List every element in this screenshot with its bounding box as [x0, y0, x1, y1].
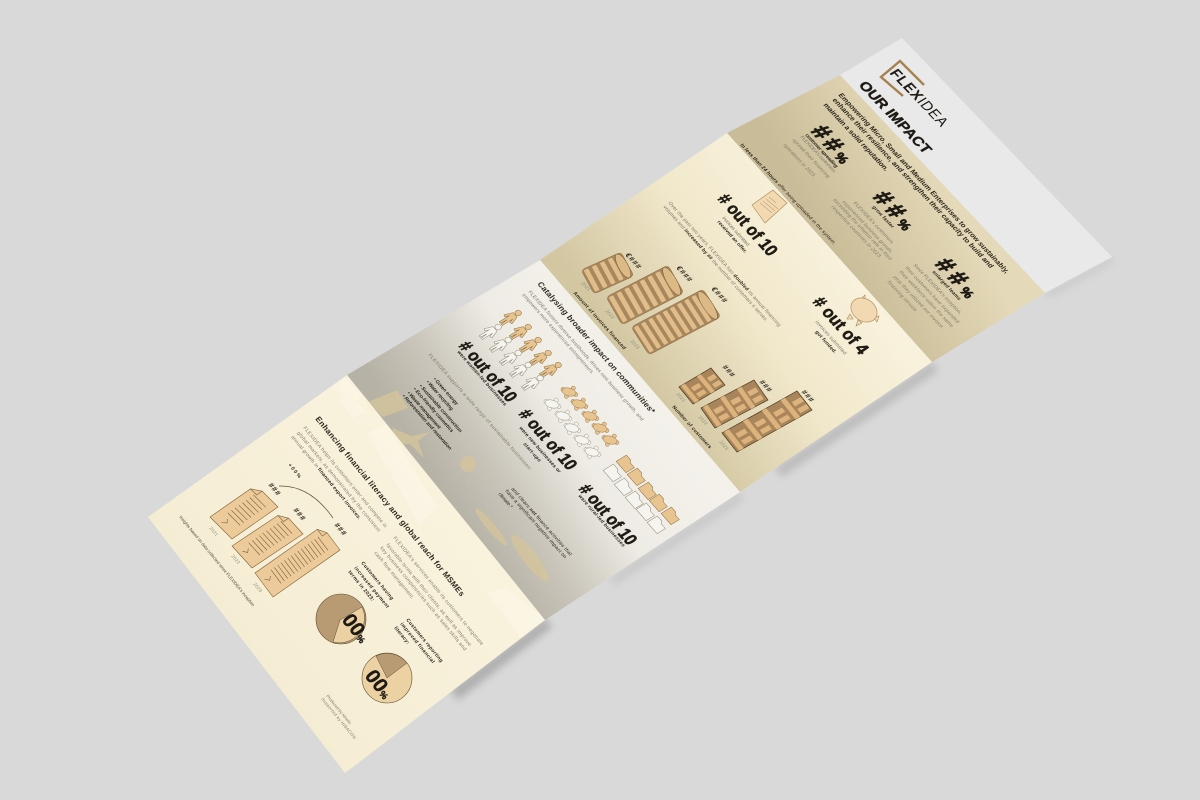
- values and years: [670, 363, 817, 451]
- heading: Enhancing financial literacy and global reach for MSMEs: [313, 415, 467, 598]
- values and years: 2023: [629, 339, 641, 350]
- stat: women-led: # out of 10: [455, 338, 522, 405]
- label: financial literacy: literacy:: [392, 626, 411, 646]
- text: exclusion note: and clears not finance activities that: [509, 487, 574, 557]
- label: payment terms: terms in 2023:: [346, 570, 376, 603]
- text: exclusion note: climate.*: [496, 492, 514, 509]
- text: export growth: global markets, as demonstrated by the consistent: [295, 431, 382, 534]
- values and years: [571, 251, 730, 351]
- text: services: cash flow management.: [372, 551, 415, 601]
- text: financing growth: Over the past two years, FLEXIDEA has doubled its annual financing: [666, 201, 782, 328]
- list: sustainable sectors: • Reforestation and restoration: [400, 394, 453, 451]
- values and years: 2022: [230, 554, 242, 565]
- stat: invoices funded: # out of 4: [809, 293, 873, 358]
- list: sustainable sectors: • Waste management: [405, 391, 442, 430]
- values and years: 2022: [604, 309, 616, 320]
- stat: customer spreading: [781, 121, 860, 179]
- icon: logo frame: [881, 61, 924, 96]
- decorative pale blocks: [333, 378, 545, 637]
- list: sustainable sectors: • Water recycling: [424, 380, 454, 412]
- stat: enlarged teams: [885, 254, 985, 329]
- credits: Produced by Kinetic: [325, 694, 353, 725]
- panel: white logo header: [840, 38, 1112, 293]
- label: payment terms: increased payment: [352, 566, 390, 610]
- arrow: growth arc: [279, 486, 333, 518]
- stat: customer spreading: ##%: [805, 121, 860, 168]
- text: export growth: annual growth in financed export invoices.: [289, 435, 362, 521]
- values and years: [208, 481, 349, 593]
- panel: financing growth: [540, 133, 932, 492]
- text: financing growth: volumes and increased by ## the number of customers it serves.: [661, 205, 769, 323]
- label: payment terms: [346, 561, 395, 610]
- values and years: 2023: [252, 582, 264, 593]
- list: sustainable sectors: [400, 377, 463, 451]
- stat: grow faster: exceeding the inflation rate in their: [831, 198, 894, 262]
- note: response time: In less than 24 hours offer being uploaded in the system.: [738, 143, 837, 246]
- growth label: +00%: [286, 463, 302, 480]
- icons: folders: [603, 455, 681, 534]
- panel: community impact: [347, 260, 740, 620]
- stat: customer spreading: customer spreading: [803, 133, 839, 169]
- stat: invoices with offer: received an offer.: [715, 220, 749, 255]
- text: services: key business competencies such as sales skills and: [378, 546, 468, 652]
- values and years: ###: [757, 378, 775, 394]
- store stack 2021: [679, 368, 725, 404]
- pie chart: financial literacy: 00%: [360, 666, 398, 703]
- intro text: enhance their resilience, and strengthen their capacity to build and: [830, 97, 995, 269]
- chart: number of customers: [670, 363, 817, 452]
- intro text: maintain a solid reputation.: [821, 102, 891, 172]
- values and years: €###: [623, 251, 644, 271]
- text: exclusion note: have a significant negative impact on: [503, 489, 568, 560]
- label: financial literacy: Customers reporting: [404, 618, 444, 664]
- stat: customer spreading: FLEXIDEA's customers: [798, 135, 837, 174]
- stat: enlarged teams: Since FLEXIDEA's inception,: [911, 263, 963, 316]
- stat: rural-led: were rural-led businesses: [576, 493, 626, 548]
- stat: new businesses: start-ups: [521, 442, 542, 463]
- intro text: FLEXIDEA fosters diverse livelihoods, drives new business growth, and: [526, 290, 645, 422]
- values and years: ###: [332, 521, 349, 538]
- stat: enlarged teams: financing service.: [885, 280, 919, 314]
- paper shadow: [450, 257, 1114, 700]
- document 2021: [210, 485, 278, 539]
- stat: enlarged teams: ##%: [929, 254, 985, 302]
- footnote: insights: Insights based on data collected since FLEXIDEA's inception: [178, 515, 256, 608]
- stat: invoices funded: invoices submitted: [813, 320, 848, 356]
- logo wordmark: FLEXIDEA: [886, 67, 951, 130]
- pie chart: payment terms: 00%: [337, 610, 375, 647]
- icons: women-led people: [477, 307, 565, 393]
- panel: financial literacy: [148, 375, 545, 773]
- heading: Catalysing broader impact on communities*: [535, 280, 658, 415]
- intro text: empowers more experienced entrepreneurs.: [520, 293, 595, 376]
- stat: new businesses: # out of 10: [515, 406, 582, 473]
- document 2023: [255, 526, 340, 597]
- icon: piggy bank: [846, 293, 882, 327]
- values and years: 2021: [580, 281, 592, 292]
- store stack 2023: [722, 391, 812, 452]
- text: sustainable range: FLEXIDEA supports a wide range of sustainable businesses:: [426, 353, 533, 472]
- label: payment terms: Customers having: [359, 561, 395, 601]
- pie chart: financial literacy: [360, 653, 412, 703]
- icons: new business: [544, 386, 619, 458]
- values and years: 2021: [208, 526, 220, 537]
- title: OUR IMPACT: [855, 78, 936, 156]
- list: sustainable sectors: • Eco-friendly cosmetics: [411, 387, 455, 434]
- coin stack 2023: [631, 289, 721, 355]
- credits: Supported by HIBACON: [320, 697, 357, 740]
- stat: invoices with offer: # out of 10: [714, 190, 782, 259]
- stat: grow faster: respective countries in 2023.: [829, 205, 883, 260]
- values and years: Amount of invoices financed: [571, 291, 627, 351]
- store stack 2022: [701, 380, 768, 428]
- text: services: FLEXIDEA's services enable its customers to negotiate: [391, 536, 485, 647]
- stat: enlarged teams: year they utilized our invoice: [891, 275, 945, 329]
- values and years: ###: [266, 481, 283, 498]
- stat: grow faster: ##%: [867, 187, 923, 235]
- stat: enlarged teams: their customers have expanded: [903, 266, 961, 325]
- stat: grow faster: [829, 187, 923, 262]
- stat: customer spreading: spread their financing: [790, 138, 831, 179]
- values and years: 2021: [675, 392, 687, 403]
- label: financial literacy: improved financial: [398, 622, 436, 665]
- values and years: 2022: [697, 415, 709, 426]
- stat: enlarged teams: enlarged teams: [930, 270, 962, 302]
- values and years: 2023: [718, 440, 730, 451]
- values and years: ###: [799, 388, 817, 404]
- list: sustainable sectors: • Sustainable construction: [417, 384, 463, 434]
- stat: women-led: were women-led businesses: [455, 349, 508, 407]
- text: services: favorable terms with their clients, as well as improve: [384, 543, 472, 648]
- stat: rural-led: # out of 10: [575, 481, 642, 548]
- list: sustainable sectors: • Green energy: [431, 377, 460, 406]
- values and years: Number of customers: [670, 405, 713, 450]
- stat: new businesses: were new businesses or: [517, 425, 562, 474]
- stat: enlarged teams: their workforce within the same: [897, 270, 955, 329]
- stat: invoices funded: got funded.: [813, 330, 838, 355]
- intro text: Empowering Micro, Small and Medium Enterprises to grow sustainably,: [836, 92, 1011, 275]
- text: export growth: FLEXIDEA helps its customers enter and compete in: [301, 426, 388, 529]
- panel: impact statistics: [727, 75, 1045, 362]
- values and years: €###: [709, 285, 730, 305]
- stat: invoices with offer: invoices submitted: [720, 216, 751, 248]
- values and years: ###: [720, 363, 738, 379]
- coin stack 2022: [606, 265, 684, 325]
- stat: grow faster: FLEXIDEA's customers: [851, 201, 895, 245]
- pie chart: payment terms: [316, 594, 375, 647]
- document 2022: [232, 512, 303, 568]
- stat: customer spreading: operations in 2023.: [781, 143, 817, 179]
- values and years: €###: [674, 264, 695, 284]
- chart: financed export invoices: [208, 481, 349, 597]
- decorative world illustration: [368, 390, 553, 585]
- stat: grow faster: grow faster: [870, 205, 895, 229]
- values and years: ###: [291, 506, 308, 523]
- chart: amount of invoices financed: [571, 251, 730, 355]
- icon: document: [752, 190, 787, 223]
- coin stack 2021: [581, 252, 634, 294]
- stat: grow faster: experienced business growth,: [840, 200, 894, 255]
